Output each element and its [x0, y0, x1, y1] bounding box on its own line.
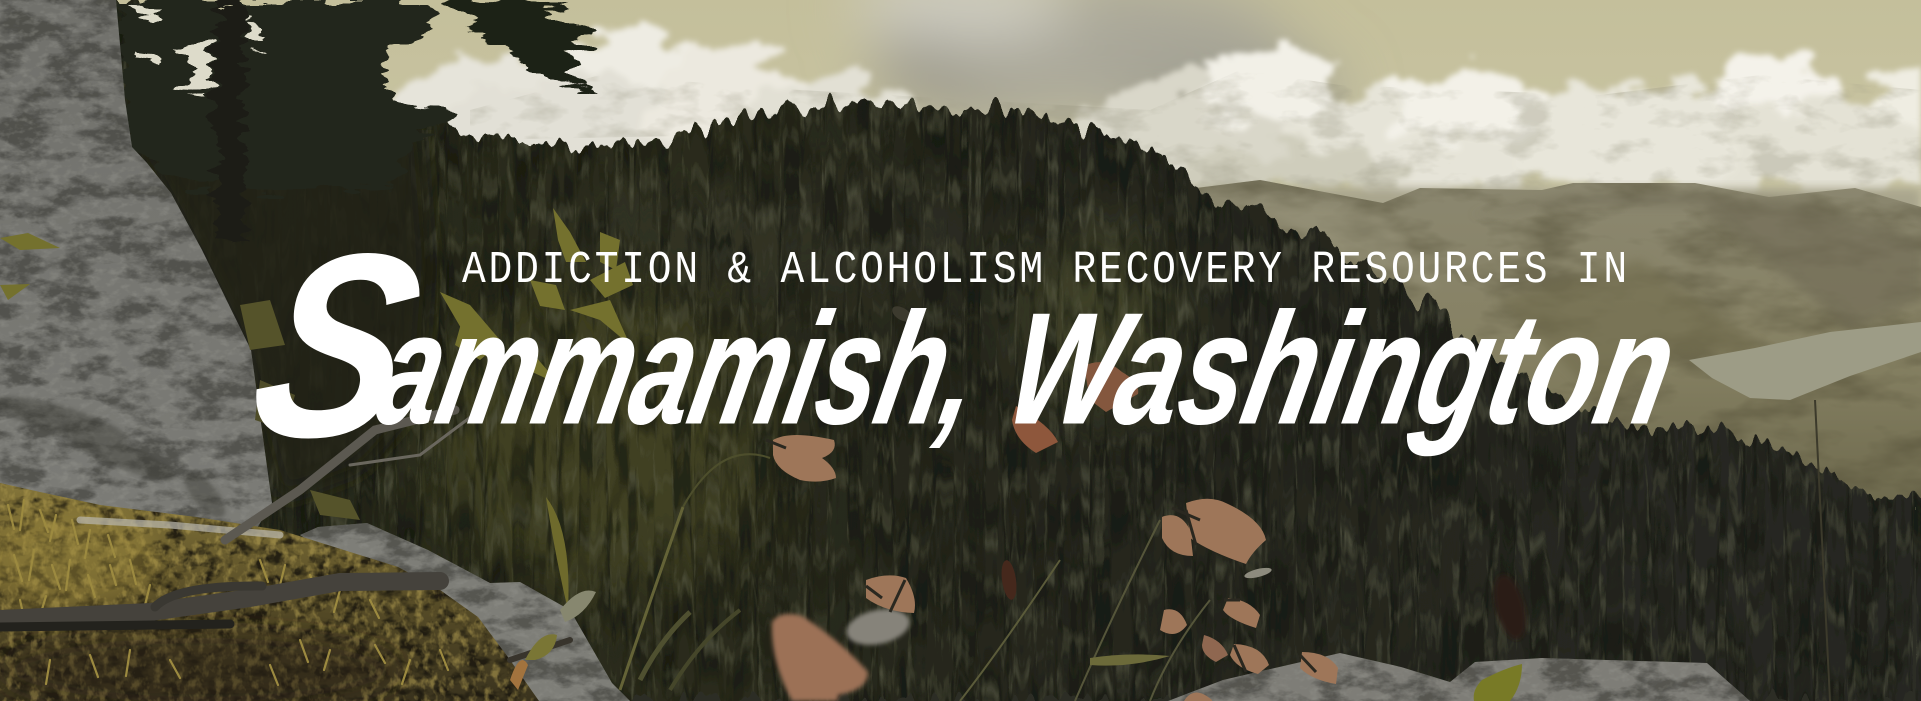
cloud: white bank right [1080, 45, 1921, 201]
title: Sammamish,: ammamish, [365, 280, 996, 457]
clouds [390, 0, 1921, 201]
flower: grey bud [843, 604, 913, 650]
subtitle: ADDICTION & ALCOHOLISM RECOVERY RESOURCES IN [462, 245, 1627, 296]
rock: lower boulder [290, 515, 640, 701]
seed pods [889, 303, 1532, 642]
flower: small bells [1223, 598, 1260, 628]
snowfield [1689, 322, 1921, 400]
distant haze [1130, 188, 1921, 228]
lower canopy shadow [120, 120, 430, 500]
flowers [766, 362, 1338, 701]
flower sepals [766, 440, 1316, 672]
title: Washington: Washington [995, 280, 1690, 457]
flower: small pair top [866, 575, 915, 613]
title: Sammamish,: S [232, 200, 443, 492]
flower: large blurred bell [772, 614, 868, 701]
moss [0, 470, 560, 701]
cloud: white bank left [390, 22, 910, 170]
cloud shading [470, 75, 1921, 189]
branches and fallen stick [0, 410, 570, 660]
mountains [1198, 180, 1921, 510]
hanging branch [447, 0, 597, 90]
big fir tree [116, 0, 597, 500]
title: Sammamish, [232, 200, 996, 492]
flower: right big bell [1186, 499, 1266, 564]
leaves: shrub branch [0, 208, 633, 520]
flower: near comma [1012, 406, 1058, 453]
moss strands [8, 500, 448, 685]
rock: left cliff [0, 0, 272, 527]
cloud: grey storm mass [850, 0, 1340, 145]
flower: upper bell [773, 435, 836, 482]
sky gaps through branches [132, 4, 270, 94]
leaf and stems near boulder [510, 400, 1830, 701]
sky [0, 0, 1921, 260]
rocks: bottom right [1160, 650, 1760, 701]
leaf: yellow-green foreground [1474, 664, 1522, 701]
